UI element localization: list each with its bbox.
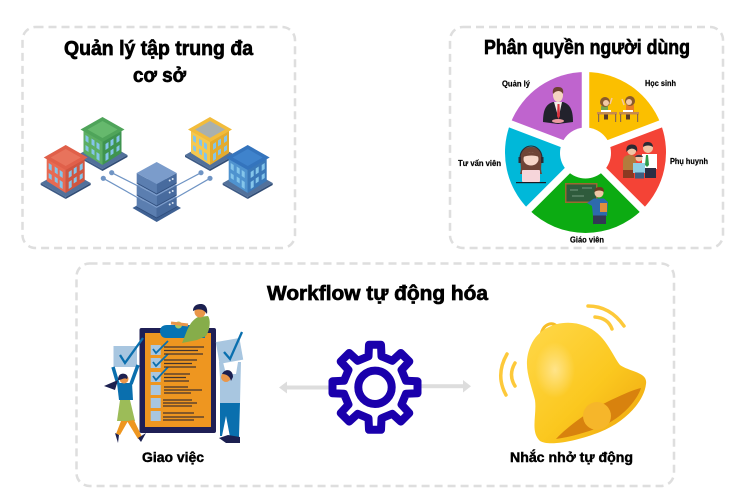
icon: manager bbox=[543, 87, 573, 124]
icon: green building bbox=[78, 117, 128, 171]
icon: gear bbox=[332, 345, 418, 430]
icon: red building bbox=[41, 145, 91, 199]
icon: server stack bbox=[132, 162, 181, 222]
label: consultant: Tư vấn viên bbox=[458, 158, 501, 168]
label: automatic reminders: Nhắc nhở tự động bbox=[510, 448, 633, 465]
label: teacher: Giáo viên bbox=[570, 234, 604, 244]
arrow: left from gear bbox=[279, 382, 329, 394]
network connector lines bbox=[101, 171, 212, 199]
label: students: Học sinh bbox=[645, 78, 676, 88]
pie chart: roles bbox=[504, 66, 667, 233]
icon: consultant with headset bbox=[516, 146, 546, 183]
icon: students bbox=[597, 96, 639, 122]
heading: workflow automation: Workflow tự động hóa bbox=[267, 283, 489, 305]
icon: parents with child bbox=[623, 142, 657, 178]
panel frame bbox=[450, 27, 723, 248]
panel: workflow automation bbox=[76, 264, 674, 486]
panel: centralized multi-site management bbox=[22, 27, 295, 248]
icon: yellow building bbox=[185, 117, 235, 171]
icon: checklist team illustration bbox=[104, 304, 243, 443]
label: assign tasks: Giao việc bbox=[142, 449, 204, 465]
label: parents: Phụ huynh bbox=[670, 156, 708, 166]
panel frame bbox=[22, 27, 295, 248]
panel: user permissions bbox=[450, 27, 723, 248]
icon: teacher at blackboard bbox=[565, 183, 608, 224]
heading: centralized management bbox=[64, 38, 254, 87]
arrow: right from gear bbox=[421, 380, 471, 392]
heading: user permissions: Phân quyền người dùng bbox=[484, 37, 690, 59]
icon: blue building bbox=[223, 145, 273, 199]
icon: ringing bell bbox=[501, 306, 646, 443]
heading: centralized management: cơ sở bbox=[133, 65, 187, 87]
label: manager: Quản lý bbox=[502, 78, 530, 88]
panel frame bbox=[76, 264, 674, 486]
heading: centralized management: Quản lý tập trung đa bbox=[64, 38, 254, 60]
